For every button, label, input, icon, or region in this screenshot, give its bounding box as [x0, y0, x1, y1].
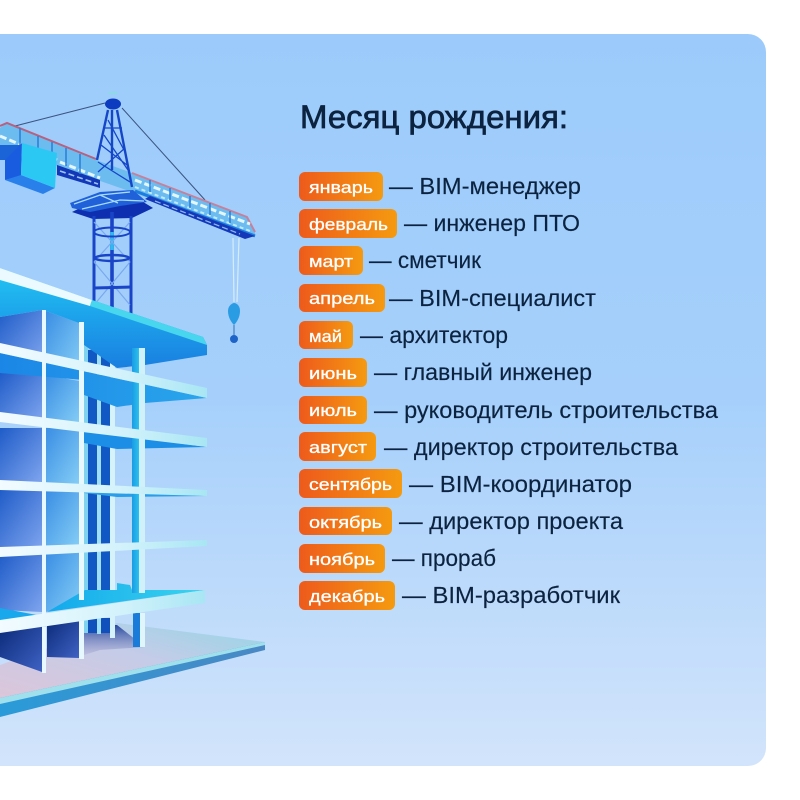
- row: ноябрь: ноябрь: [309, 550, 375, 569]
- crane mast: [94, 212, 131, 316]
- row: октябрь: октябрь: [309, 513, 382, 532]
- crane cables: [15, 103, 205, 200]
- row: декабрь: [299, 581, 621, 610]
- slab undersides: [0, 353, 207, 497]
- crane hook: [228, 238, 240, 343]
- row: март: март: [309, 252, 353, 271]
- row: июнь: — главный инженер: [374, 359, 592, 385]
- row: ноябрь: [299, 544, 496, 573]
- row: сентябрь: сентябрь: [309, 475, 392, 494]
- lower slab top: [0, 583, 205, 622]
- crane top tower: [97, 92, 132, 187]
- row: январь: январь: [309, 178, 373, 197]
- illustration: tower crane: [0, 92, 255, 343]
- row: октябрь: — директор проекта: [399, 508, 623, 534]
- row: май: — архитектор: [360, 322, 508, 348]
- row: август: [299, 432, 678, 461]
- row: апрель: [299, 284, 596, 312]
- row: декабрь: декабрь: [309, 587, 385, 606]
- floor slabs: [0, 343, 207, 633]
- row: февраль: февраль: [309, 215, 388, 234]
- row: январь: — BIM-менеджер: [389, 173, 581, 199]
- row: октябрь: [299, 507, 623, 535]
- roof slab: [0, 268, 207, 368]
- row: июль: — руководитель строительства: [374, 397, 718, 423]
- list of months: [299, 172, 718, 610]
- row: май: май: [309, 327, 342, 346]
- row: март: — сметчик: [369, 247, 482, 273]
- row: август: — директор строительства: [384, 434, 678, 460]
- illustration: building: [0, 268, 265, 717]
- back walls by floor: [0, 310, 79, 672]
- row: май: [299, 321, 508, 349]
- title: Месяц рождения:: [300, 99, 568, 135]
- inner dark columns: [84, 345, 115, 638]
- row: сентябрь: — BIM-координатор: [409, 471, 632, 497]
- row: июль: июль: [309, 401, 357, 420]
- row: сентябрь: [299, 469, 632, 498]
- row: февраль: — инженер ПТО: [404, 210, 580, 236]
- row: март: [299, 246, 482, 275]
- crane boom: [0, 123, 255, 239]
- crane turntable: [70, 190, 153, 219]
- row: июнь: июнь: [309, 364, 357, 383]
- ground plate: [0, 623, 265, 717]
- row: август: август: [309, 438, 367, 457]
- row: ноябрь: — прораб: [392, 545, 496, 571]
- row: декабрь: — BIM-разработчик: [402, 582, 621, 608]
- crane counterweight: [0, 143, 57, 194]
- row: апрель: — BIM-специалист: [389, 285, 596, 311]
- row: февраль: [299, 209, 580, 238]
- row: апрель: апрель: [309, 289, 375, 308]
- row: январь: [299, 172, 581, 201]
- front columns: [42, 310, 145, 673]
- row: июнь: [299, 358, 592, 387]
